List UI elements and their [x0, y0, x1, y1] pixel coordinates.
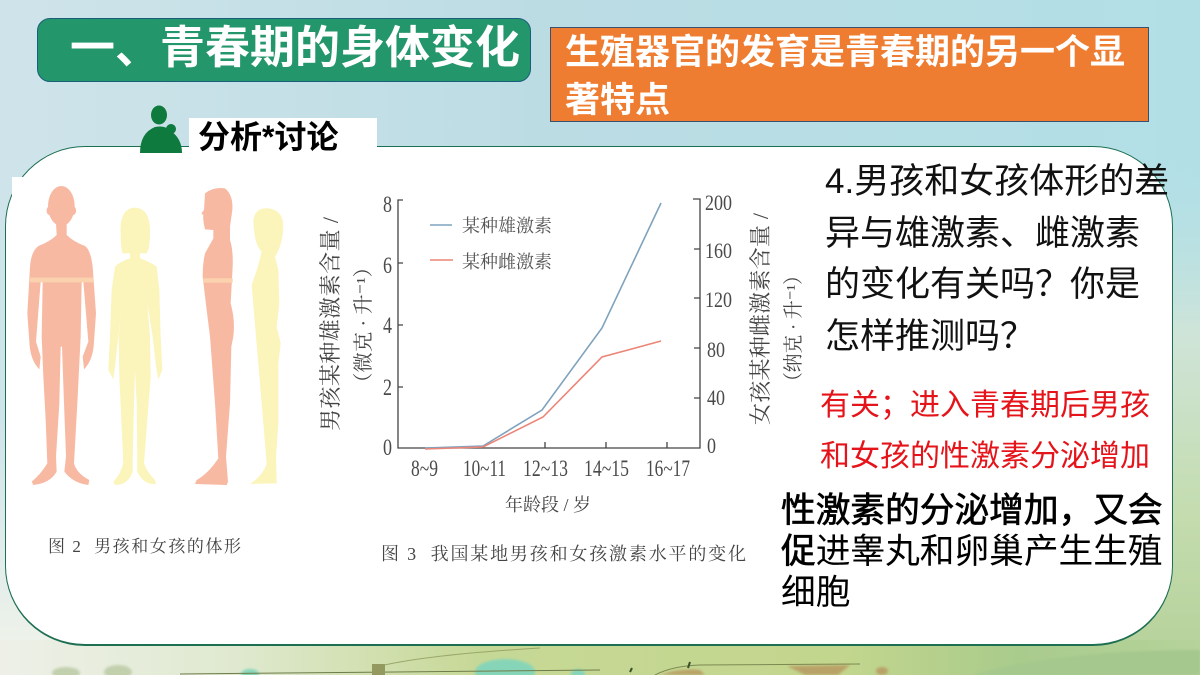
boy side silhouette [195, 188, 234, 485]
figure 3 caption: 图 3 我国某地男孩和女孩激素水平的变化 [381, 544, 746, 564]
explanatory text [781, 492, 1163, 612]
x axis title: 年龄段 / 岁 [505, 494, 591, 515]
legend [430, 216, 552, 272]
right axis title: 女孩某种雌激素含量 / [748, 212, 773, 425]
question text: 异与雄激素、雌激素 [825, 214, 1140, 252]
left axis title: 男孩某种雄激素含量 / [318, 216, 343, 431]
legend: 某种雄激素 [462, 216, 552, 236]
right axis numbers: 80 [707, 337, 725, 362]
x axis labels: 16~17 [646, 456, 690, 481]
right axis numbers: 160 [705, 238, 732, 263]
answer text in red: 和女孩的性激素分泌增加 [820, 440, 1150, 473]
girl side silhouette [250, 208, 283, 484]
title text: 一、青春期的身体变化 [70, 22, 520, 73]
left axis title [318, 216, 375, 431]
callout text: 生殖器官的发育是青春期的另一个显 [565, 33, 1125, 72]
icon: discussion people [140, 106, 182, 153]
callout text: 著特点 [565, 81, 670, 120]
answer text in red: 有关；进入青春期后男孩 [820, 389, 1150, 422]
girl front silhouette [108, 208, 162, 485]
legend: 某种雌激素 [462, 252, 552, 272]
callout text [565, 33, 1125, 120]
x axis labels [411, 456, 690, 481]
right axis numbers [705, 190, 732, 458]
question text: 的变化有关吗？你是 [825, 265, 1140, 304]
white patch on panel corner [12, 177, 42, 203]
left axis title: （微克 · 升⁻¹） [352, 257, 375, 393]
x axis labels: 12~13 [523, 456, 568, 481]
x axis labels: 8~9 [411, 456, 438, 481]
x axis labels: 14~15 [584, 456, 629, 481]
right axis title [748, 212, 805, 425]
right axis numbers: 0 [707, 433, 716, 458]
series: estrogen line [425, 341, 661, 449]
series: androgen line [425, 203, 661, 448]
explanatory text: 促进睾丸和卵巢产生生殖 [781, 533, 1163, 571]
right axis numbers: 200 [705, 190, 732, 215]
chart axes and ticks [398, 199, 700, 448]
section label background [189, 118, 377, 154]
orange callout [550, 27, 1149, 122]
right axis title: （纳克 · 升⁻¹） [782, 266, 805, 391]
explanatory text: 细胞 [781, 574, 850, 612]
question text: 怎样推测吗？ [825, 316, 1035, 356]
right axis numbers: 40 [707, 385, 725, 410]
panel: main white card [5, 146, 1173, 646]
title banner [37, 18, 531, 82]
left axis numbers: 8 [383, 192, 392, 217]
section label text: 分析*讨论 [198, 119, 338, 155]
left axis numbers: 2 [383, 375, 392, 400]
x axis labels: 10~11 [463, 456, 506, 481]
figure 2: body silhouettes [27, 186, 284, 485]
boy front silhouette [27, 186, 96, 485]
explanatory text: 性激素的分泌增加，又会 [781, 492, 1163, 530]
left axis numbers: 6 [383, 253, 392, 278]
left axis numbers [383, 192, 392, 460]
right axis numbers: 120 [705, 287, 732, 312]
left axis numbers: 0 [383, 435, 392, 460]
question text [825, 162, 1169, 356]
figure 3: hormone line chart [318, 190, 805, 564]
question text: 4.男孩和女孩体形的差 [825, 162, 1169, 201]
figure 2 caption: 图 2 男孩和女孩的体形 [48, 537, 241, 556]
answer text in red [820, 389, 1150, 473]
left axis numbers: 4 [383, 313, 392, 338]
